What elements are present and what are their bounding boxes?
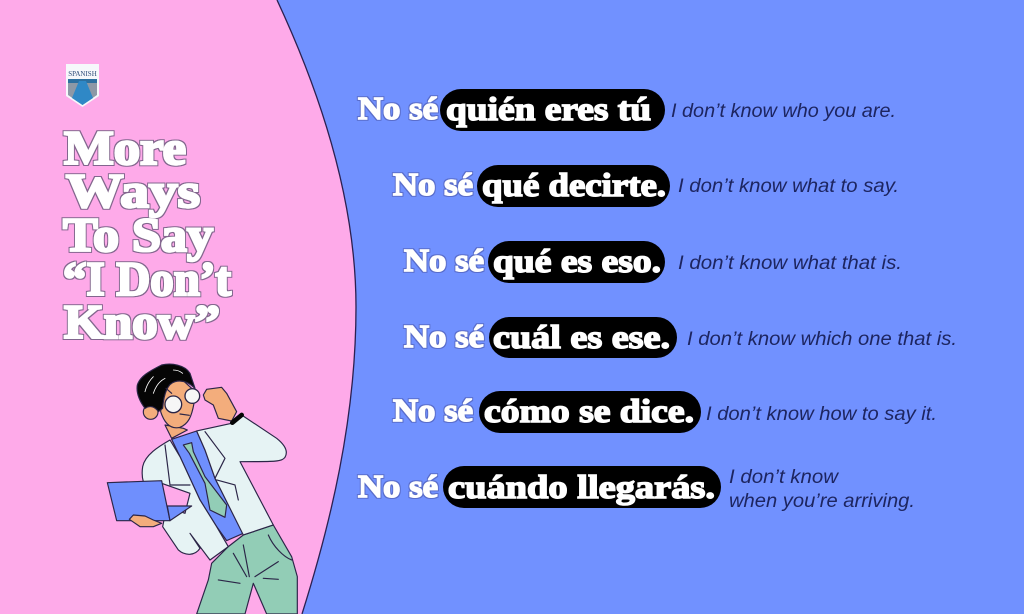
row 3: No sé [404, 242, 484, 278]
trousers [197, 525, 297, 614]
laptop [107, 481, 170, 521]
row 1 [358, 89, 896, 131]
row 6: I don’t know [729, 467, 839, 488]
shirt [172, 431, 243, 541]
title: Ways [66, 165, 200, 218]
ear [143, 405, 158, 419]
curve edge line [277, 0, 356, 614]
row 1: No sé [358, 90, 438, 126]
row 1: quién eres tú [446, 92, 651, 128]
row 3: I don’t know what that is. [678, 253, 902, 274]
row 5 [393, 391, 937, 433]
row 6: cuándo llegarás. [448, 470, 715, 506]
face [161, 380, 194, 428]
row 5: No sé [393, 392, 473, 428]
glasses [165, 396, 182, 413]
logo shield [66, 64, 99, 107]
row 5: I don’t know how to say it. [706, 404, 937, 425]
row 3: qué es eso. [493, 244, 661, 280]
row 4: I don’t know which one that is. [687, 329, 957, 350]
hand holding laptop [129, 515, 162, 527]
row 6: when you’re arriving. [729, 491, 915, 512]
mouth and brows [166, 388, 189, 415]
title: To Say [63, 209, 213, 262]
title: “I Don’t [63, 253, 231, 306]
row 4 [404, 317, 957, 358]
row 2: qué decirte. [482, 168, 666, 204]
logo shield: SPANISH [68, 70, 97, 78]
title: More [64, 122, 186, 175]
lapel [165, 432, 238, 500]
jacket left side and arm [142, 440, 228, 560]
row 2: No sé [393, 166, 473, 202]
row 5: cómo se dice. [484, 394, 694, 430]
hair highlights [145, 370, 183, 393]
row 1: I don’t know who you are. [671, 101, 896, 122]
row 4: No sé [404, 318, 484, 354]
row 2: I don’t know what to say. [678, 176, 899, 197]
trousers creases [218, 535, 292, 583]
row 3 [404, 241, 902, 283]
watch [232, 415, 242, 423]
illustration: man with glasses and laptop [107, 364, 297, 614]
hand raised [203, 387, 237, 421]
row 6 [358, 466, 915, 512]
panel: pink curved area [0, 0, 356, 614]
row 4: cuál es ese. [493, 320, 670, 356]
hair [137, 364, 195, 412]
title: Know” [64, 296, 220, 349]
tie [183, 443, 227, 517]
row 2 [393, 165, 899, 207]
row 6: No sé [358, 468, 438, 504]
jacket right side and sleeve [197, 415, 286, 535]
neck [165, 425, 187, 438]
title [63, 122, 231, 349]
